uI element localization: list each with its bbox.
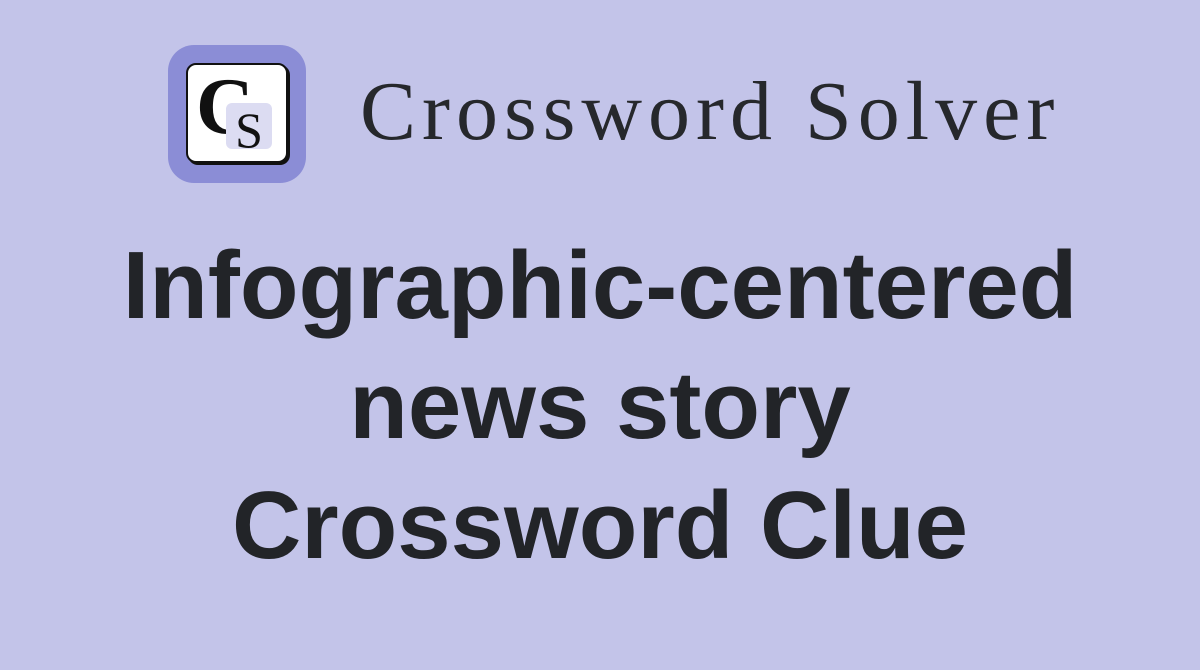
headline xyxy=(123,232,1077,579)
letter S box xyxy=(226,103,272,149)
headline: news story xyxy=(349,352,851,459)
site name: Crossword Solver xyxy=(360,65,1060,158)
letter S box: S xyxy=(235,102,263,158)
logo tile xyxy=(186,63,288,163)
letter C: C xyxy=(196,63,254,151)
logo xyxy=(168,45,306,183)
headline: Crossword Clue xyxy=(232,472,968,579)
headline: Infographic-centered xyxy=(123,232,1077,339)
